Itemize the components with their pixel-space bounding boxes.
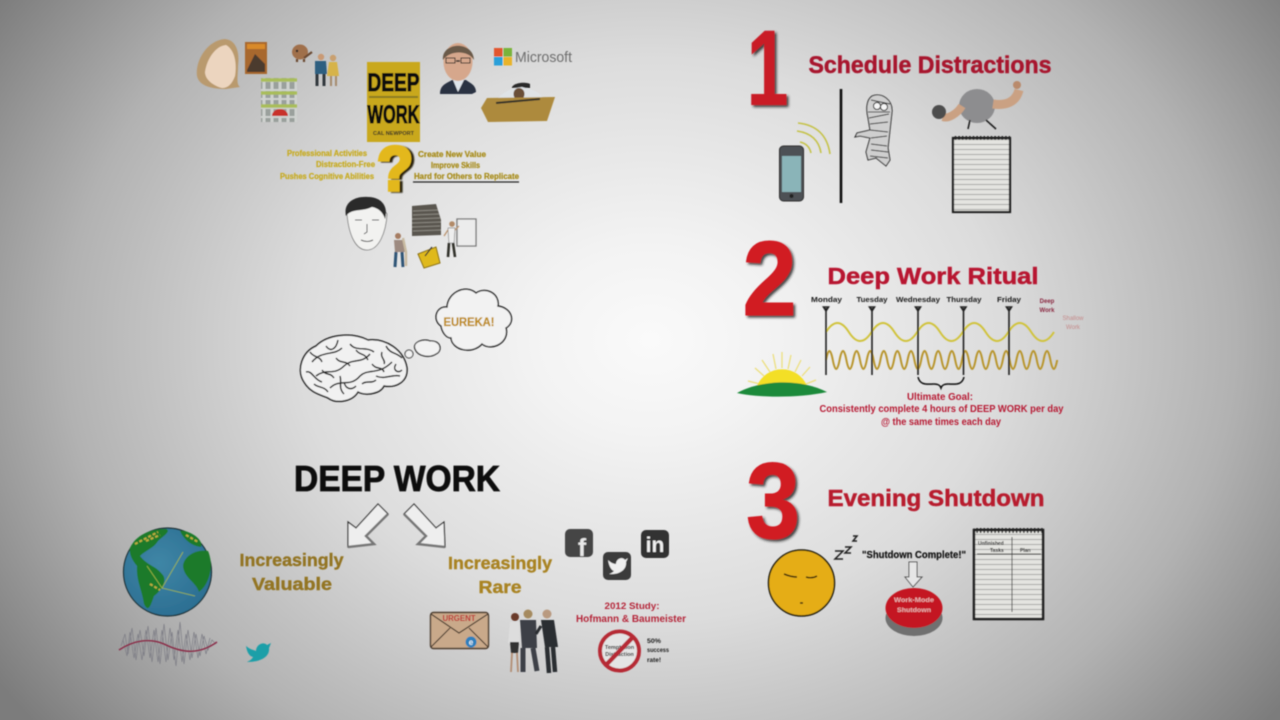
text: professional activities list: Pushes Cognitive Abilities: [280, 172, 375, 181]
panel: book and examples: [197, 39, 572, 268]
logo: Microsoft: [494, 48, 572, 66]
legend: deep work and shallow work: [1040, 299, 1084, 331]
chart: day markers: [824, 307, 1012, 375]
icon: sketched man's face: [346, 197, 387, 250]
icon: sunrise over hill: [737, 352, 827, 397]
text: ultimate goal: Ultimate Goal:: [907, 392, 973, 403]
icon: curly brace: [918, 377, 964, 388]
number 1: 1: [746, 7, 788, 128]
text: Increasingly Valuable: [240, 550, 344, 594]
icon: checklist notebook: Tasks: [990, 548, 1004, 554]
icon: question mark: ?: [377, 135, 413, 204]
icon: small book cover: [245, 42, 267, 74]
icon: checklist notebook: Unfinished: [978, 541, 1004, 547]
number 2: 2: [742, 220, 796, 338]
text: Increasingly Rare: Increasingly: [448, 553, 552, 573]
arrow: down right: [404, 504, 445, 547]
book: Deep Work cover: WORK: [368, 101, 420, 129]
icon: red shutdown button: [886, 588, 942, 636]
icon: LinkedIn tile: [641, 530, 669, 558]
heading: DEEP WORK: DEEP WORK: [294, 458, 500, 499]
icon: embracing couple: [394, 233, 406, 267]
text: professional activities list: [280, 149, 376, 181]
icon: red shutdown button: Work-Mode: [894, 597, 934, 604]
icon: mummy: [855, 95, 892, 166]
text: Increasingly Rare: Rare: [478, 577, 522, 597]
icon: teacher at whiteboard: [444, 219, 476, 257]
text: weekdays: [811, 295, 1022, 304]
text: 2012 study: [576, 601, 686, 625]
number 3: 3: [746, 440, 800, 561]
icon: Facebook tile: f: [578, 534, 587, 562]
icon: yellow notebook and pen: [418, 247, 440, 268]
text: ultimate goal: Consistently complete 4 hours of DEEP WORK per day: [820, 404, 1064, 415]
text: professional activities list: Professional Activities: [287, 149, 368, 158]
icon: brain lifting dumbbell: [932, 81, 1021, 129]
book: Deep Work cover: DEEP: [368, 69, 420, 97]
chart: brainwave scribble: [119, 622, 217, 666]
icon: sleeping face: [768, 550, 834, 616]
icon: teal bird: [246, 643, 271, 662]
text: 2012 study: Hofmann & Baumeister: [576, 614, 686, 625]
panel: step 2 deep work ritual: [737, 220, 1084, 428]
chart: deep wave: [826, 323, 1054, 341]
icon: urgent envelope: e: [469, 638, 474, 647]
panel: step 3 evening shutdown: [746, 440, 1044, 636]
icon: Facebook tile: [565, 529, 593, 562]
legend: deep work and shallow work: Shallow: [1062, 316, 1084, 322]
text: Increasingly Valuable: Valuable: [252, 574, 332, 594]
text: ultimate goal: [820, 392, 1064, 428]
arrow: down to button: [905, 562, 922, 587]
legend: deep work and shallow work: Work: [1066, 325, 1081, 331]
text: Increasingly Valuable: Increasingly: [240, 550, 344, 570]
text: 50% success rate: [647, 638, 669, 664]
text: 50% success rate: 50%: [647, 638, 661, 645]
book: Deep Work cover: [367, 62, 420, 142]
text: deep work criteria: Improve Skills: [431, 161, 480, 170]
logo: Microsoft: Microsoft: [515, 50, 572, 66]
chart: daily rhythm: [824, 307, 1057, 375]
icon: checklist notebook: [974, 528, 1043, 619]
text: weekdays: Wednesday: [896, 295, 941, 304]
text: weekdays: Friday: [997, 295, 1022, 304]
text: professional activities list: Distraction-Free: [316, 160, 376, 169]
text: deep work criteria: Create New Value: [418, 150, 487, 159]
text: weekdays: Tuesday: [856, 295, 888, 304]
icon: urgent envelope: URGENT: [442, 614, 476, 623]
chart: shallow wave: [826, 351, 1057, 369]
thought bubble: EUREKA!: [405, 289, 512, 358]
text: weekdays: Monday: [811, 295, 843, 304]
icon: building: [261, 78, 297, 122]
icon: Twitter tile: [603, 552, 631, 580]
heading: Schedule Distractions: Schedule Distractions: [808, 52, 1052, 79]
text: shutdown complete: "Shutdown Complete!": [862, 550, 966, 561]
legend: deep work and shallow work: Work: [1040, 308, 1055, 314]
icon: stack of papers: [412, 204, 441, 236]
text: 50% success rate: success: [647, 647, 669, 654]
icon: person asleep at desk: [481, 83, 555, 122]
illustration: three business people: [508, 610, 558, 673]
icon: globe: [124, 528, 212, 616]
icon: brain outline: [300, 335, 407, 401]
photo: Bill Gates portrait: [440, 43, 476, 94]
icon: urgent envelope: [430, 612, 488, 648]
text: deep work criteria: [413, 150, 520, 182]
icon: checklist notebook: Plan: [1020, 548, 1031, 554]
icon: no temptation sign: Temptation: [605, 645, 635, 651]
icon: dog: [292, 44, 312, 62]
icon: vibrating phone: [780, 123, 830, 201]
icon: no temptation sign: Distraction: [605, 652, 635, 658]
icon: red shutdown button: Shutdown: [897, 607, 931, 614]
arrow: down left: [348, 504, 388, 547]
text: Increasingly Rare: [448, 553, 552, 597]
heading: Deep Work Ritual: Deep Work Ritual: [828, 263, 1038, 289]
panel: step 1 schedule distractions: [746, 7, 1052, 212]
panel: brain and eureka thought: [300, 289, 512, 401]
text: 50% success rate: rate!: [647, 657, 661, 664]
icon: zzz: [835, 536, 857, 559]
photo: author portrait: [197, 39, 240, 89]
book: Deep Work cover: CAL NEWPORT: [373, 131, 415, 137]
divider line: [840, 89, 842, 203]
icon: LinkedIn tile: in: [646, 534, 664, 557]
text: deep work criteria: Hard for Others to Replicate: [414, 172, 520, 181]
heading: Evening Shutdown: Evening Shutdown: [828, 485, 1044, 511]
icon: lined notepad: [953, 136, 1010, 212]
text: ultimate goal: @ the same times each day: [881, 417, 1001, 428]
icon: no temptation sign: [600, 632, 639, 670]
panel: deep work valuable and rare: [119, 458, 686, 673]
thought bubble: EUREKA!: EUREKA!: [444, 317, 494, 329]
text: weekdays: Thursday: [946, 295, 982, 304]
icon: two children: [315, 54, 339, 86]
text: 2012 study: 2012 Study:: [604, 601, 660, 612]
legend: deep work and shallow work: Deep: [1040, 299, 1055, 305]
